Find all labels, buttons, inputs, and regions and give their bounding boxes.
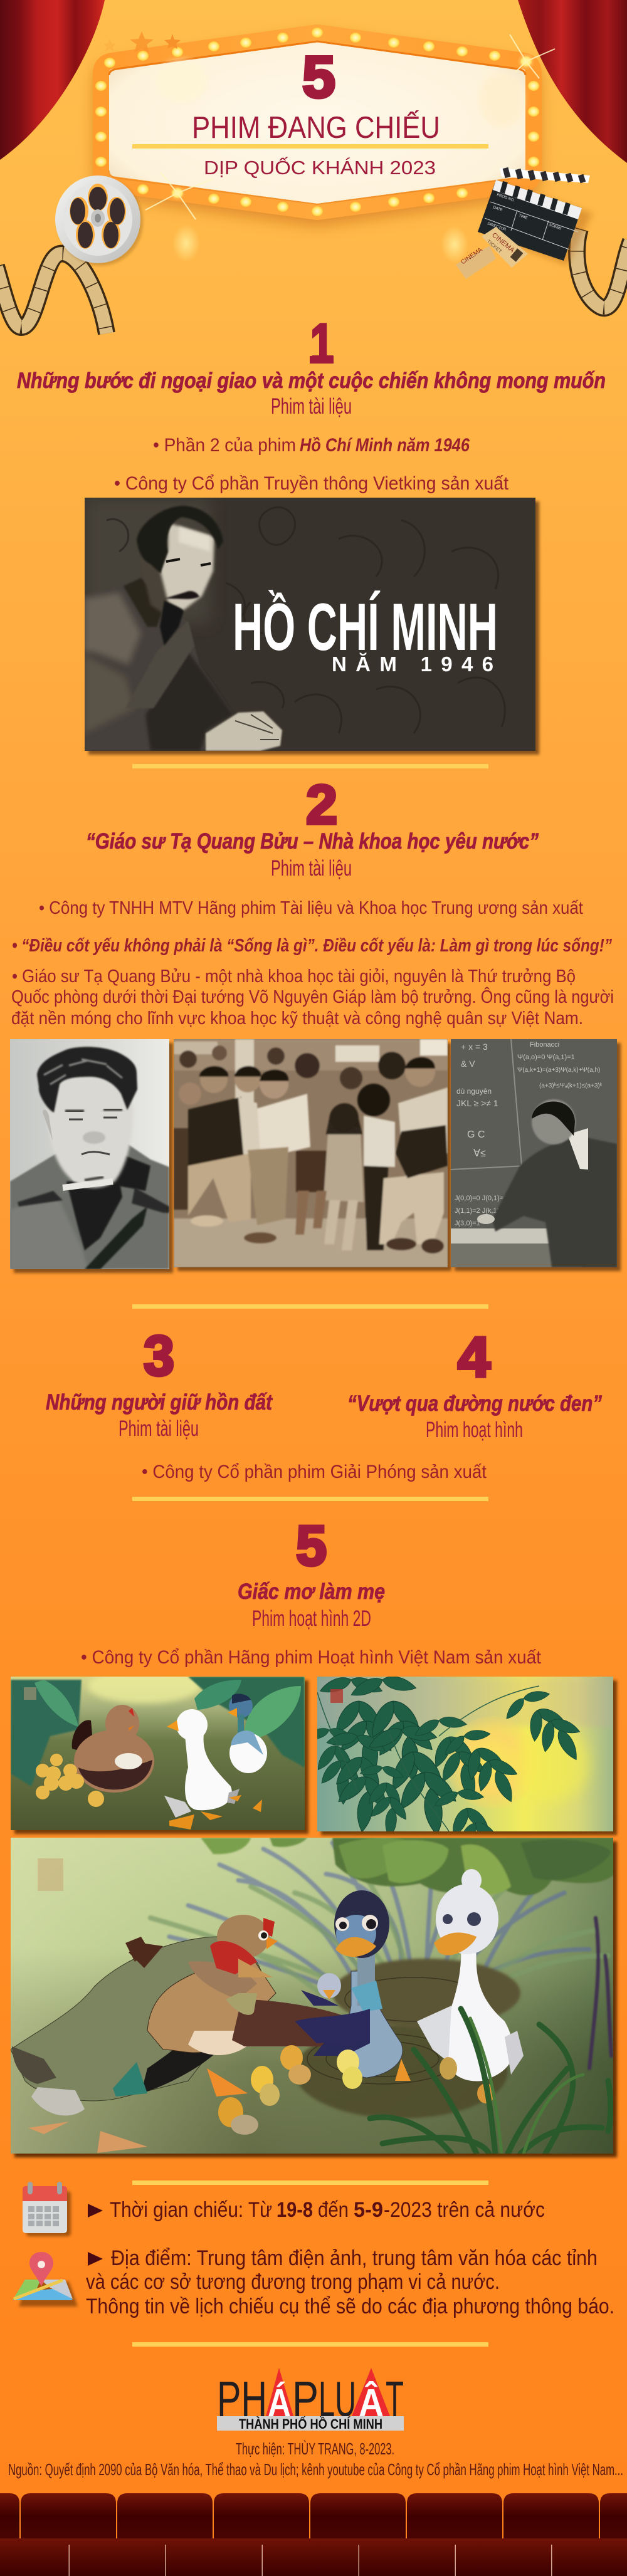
photo: crowd xyxy=(174,1039,451,1271)
logo: Pháp Luật: T xyxy=(386,2371,404,2427)
watermark xyxy=(38,1858,63,1891)
icon: film reel xyxy=(55,175,143,266)
chalk notes xyxy=(455,1041,603,1227)
number 4: 4 xyxy=(458,1326,490,1389)
crowd figures xyxy=(187,1096,244,1166)
bullet: producer 1: • Công ty Cổ phần Truyền thông Vietking sản xuất xyxy=(114,473,509,494)
olive hen xyxy=(11,1937,263,2153)
hands xyxy=(206,711,282,751)
front row of seats xyxy=(0,2538,627,2576)
logo: Pháp Luật: LU xyxy=(319,2371,356,2427)
bullet: part 2: Hồ Chí Minh năm 1946 xyxy=(300,435,470,456)
blue duck xyxy=(295,1890,411,2081)
play time: đến xyxy=(318,2198,349,2222)
white goose xyxy=(417,1869,524,2081)
logo: Pháp Luật xyxy=(217,2368,404,2432)
title number: 5 xyxy=(302,44,335,110)
chalk notes: G C xyxy=(467,1129,485,1140)
head xyxy=(145,583,164,613)
bullet: part 2 xyxy=(153,435,470,456)
icon: cinema tickets: CINEMA xyxy=(490,231,516,254)
hair xyxy=(37,1047,137,1113)
chicks xyxy=(218,2045,495,2135)
duck xyxy=(228,1694,267,1812)
film strip right xyxy=(577,229,627,308)
reeds xyxy=(150,1843,611,2068)
nest xyxy=(295,2024,508,2118)
logo: Pháp Luật: Á xyxy=(268,2382,291,2425)
icon: cinema tickets xyxy=(456,227,528,279)
section 4 xyxy=(347,1326,602,1442)
divider xyxy=(132,2342,488,2347)
photo: blackboard xyxy=(451,1039,621,1271)
divider xyxy=(132,1497,488,1501)
marquee sign xyxy=(94,28,555,263)
section 3 xyxy=(46,1325,273,1441)
curtain left xyxy=(0,0,105,160)
sparkles and stars xyxy=(103,31,555,263)
logo: Pháp Luật: Ậ xyxy=(359,2382,384,2425)
watermark xyxy=(24,1687,36,1700)
genre 4: Phim hoạt hình xyxy=(426,1418,523,1442)
icon: clapperboard: DATE xyxy=(492,206,503,212)
genre 3: Phim tài liệu xyxy=(119,1416,199,1441)
play time xyxy=(88,2198,545,2222)
chicks xyxy=(36,1754,104,1807)
number 1: 1 xyxy=(310,312,334,374)
divider xyxy=(132,764,488,768)
play time: -2023 trên cả nước xyxy=(384,2198,545,2222)
bullet: producer 3 and 4: • Công ty Cổ phần phim Giải Phóng sản xuất xyxy=(142,1462,487,1482)
big leaves xyxy=(201,1838,614,1895)
title divider xyxy=(132,144,488,149)
icon: clapperboard: TIME xyxy=(518,214,528,221)
icon: cinema tickets: CINEMA xyxy=(460,246,484,266)
chalk notes: & V xyxy=(461,1059,475,1069)
poster year: NĂM 1946 xyxy=(332,652,493,676)
icon: clapperboard: SCENE xyxy=(548,223,562,231)
number 2: 2 xyxy=(306,773,337,835)
chalk notes: JKL ≥ >≠ 1 xyxy=(456,1098,498,1108)
hen xyxy=(72,1705,154,1793)
play time: 5-9 xyxy=(354,2198,383,2222)
bullet: producer 5: • Công ty Cổ phần Hãng phim Hoạt hình Việt Nam sản xuất xyxy=(81,1647,542,1668)
chalk notes: dù nguyên xyxy=(456,1087,492,1096)
image: hen, goose and duck xyxy=(11,1668,308,1834)
chalk notes: Ψ(a,o)=0 Ψ(a,1)=1 xyxy=(517,1054,575,1061)
chalk notes: J(1,1)=2 J(k,1) xyxy=(455,1207,499,1215)
logo: Pháp Luật: THÀNH PHỐ HỒ CHÍ MINH xyxy=(239,2416,382,2432)
goose xyxy=(164,1709,240,1830)
logo: Pháp Luật: PH xyxy=(217,2371,267,2427)
number 3: 3 xyxy=(144,1325,174,1388)
subtitle: DỊP QUỐC KHÁNH 2023 xyxy=(204,156,436,179)
icon: clapperboard xyxy=(478,168,593,266)
marquee lamps xyxy=(95,28,539,216)
image: leaves and sun xyxy=(304,1669,617,1875)
venue xyxy=(86,2246,614,2318)
chalk notes: + x = 3 xyxy=(461,1042,488,1052)
chalk notes: (a+3)ᵏ≤Ψₐ(k+1)≤(a+3)ᵏ xyxy=(539,1082,603,1089)
icon: map pin xyxy=(13,2252,78,2306)
bullet: part 2: • Phần 2 của phim xyxy=(153,435,296,456)
play time: 19-8 xyxy=(277,2198,313,2222)
inner shirt xyxy=(66,1178,122,1250)
film title 2: “Giáo sư Tạ Quang Bửu – Nhà khoa học yêu nước” xyxy=(86,829,539,854)
foreground grass xyxy=(370,2009,611,2154)
divider xyxy=(132,2181,488,2185)
film title 5: Giấc mơ làm mẹ xyxy=(238,1579,385,1604)
jacket xyxy=(10,1144,169,1269)
tan hen xyxy=(147,1915,342,2097)
icon: calendar xyxy=(23,2182,71,2236)
back row of seats xyxy=(0,2493,627,2540)
logo: Pháp Luật: P xyxy=(292,2371,319,2427)
jacket xyxy=(85,620,205,751)
body paragraph: đặt nền móng cho lĩnh vực khoa học kỹ thuật và công nghệ quân sự Việt Nam. xyxy=(11,1008,583,1029)
chalk notes: J(0,0)=0 J(0,1)=1 xyxy=(455,1195,507,1202)
chalk notes: J(3,0)=1 xyxy=(455,1220,480,1227)
icon: cinema tickets: TICKET xyxy=(486,239,503,254)
chalk notes: Ψ(a,k+1)=(a+3)Ψ(a,k)+Ψ(a,h) xyxy=(517,1067,600,1074)
section 1 xyxy=(17,312,606,494)
face xyxy=(46,1073,133,1188)
genre 1: Phim tài liệu xyxy=(271,394,352,419)
cinema seats xyxy=(0,2493,627,2576)
credit: Thực hiện: THÙY TRANG, 8-2023. xyxy=(236,2439,394,2458)
play time: Thời gian chiếu: Từ xyxy=(110,2198,272,2222)
photo: Ho Chi Minh 1946 xyxy=(85,498,539,755)
icon: clapperboard: PROD NO. xyxy=(496,193,515,203)
film strip left xyxy=(0,254,107,333)
image: hens and ducks at nest xyxy=(11,1838,617,2157)
venue: và các cơ sở tương đương trong phạm vi cả nước. xyxy=(86,2270,500,2294)
section 2 xyxy=(11,773,614,1029)
film title 3: Những người giữ hồn đất xyxy=(46,1390,273,1415)
chalk notes: Fibonacci xyxy=(530,1041,559,1049)
curtain right xyxy=(518,0,627,163)
genre 5: Phim hoạt hình 2D xyxy=(252,1606,371,1631)
number 5: 5 xyxy=(296,1515,327,1578)
section 5 xyxy=(81,1515,542,1668)
body paragraph xyxy=(11,966,614,1029)
title: PHIM ĐANG CHIẾU xyxy=(192,111,440,145)
divider xyxy=(132,1304,488,1309)
baby bird xyxy=(301,1973,341,2006)
chalk notes: ∀≤ xyxy=(473,1148,486,1159)
genre 2: Phim tài liệu xyxy=(271,856,352,881)
icon: clapperboard: DIRECTOR xyxy=(487,222,507,232)
photo: professor portrait xyxy=(10,1039,173,1273)
